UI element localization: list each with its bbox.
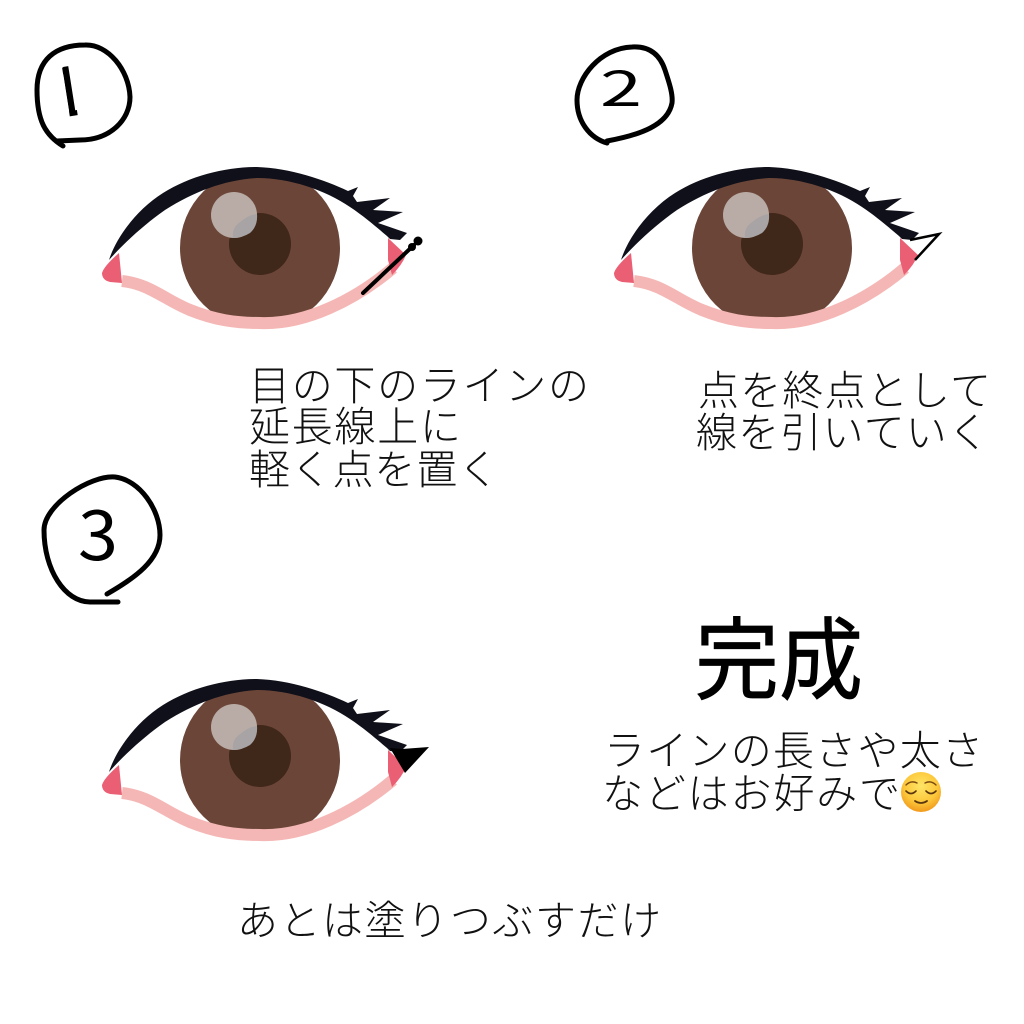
pupil <box>229 725 291 787</box>
step 3 caption: あとは塗りつぶすだけ <box>237 898 661 944</box>
outer corner <box>388 238 406 275</box>
iris <box>180 178 340 318</box>
lower lid line <box>122 780 393 835</box>
inner corner <box>614 253 634 283</box>
lower lid line <box>122 268 393 323</box>
finished note: ラインの長さや太さ <box>604 728 983 774</box>
iris <box>180 690 340 830</box>
step 1 eye with dot and guide line <box>102 167 422 328</box>
step 1 number badge: 1 <box>41 35 93 139</box>
highlight <box>723 192 769 238</box>
upper lid and lashes <box>109 167 407 260</box>
step 2 caption <box>696 368 991 456</box>
step 3 number badge: 3 <box>78 481 118 580</box>
inner corner <box>102 765 122 795</box>
upper lid and lashes <box>109 679 407 772</box>
step 1 caption: 延長線上に <box>249 404 461 450</box>
outer corner <box>900 238 918 275</box>
finished note: などはお好みで <box>602 771 900 817</box>
step 3 eye with filled wing <box>102 679 429 840</box>
step 1 caption: 目の下のラインの <box>249 363 589 409</box>
step 2 eye with outlined wing <box>614 167 939 328</box>
upper lid and lashes <box>621 167 919 260</box>
outer corner <box>388 750 406 787</box>
iris <box>692 178 852 318</box>
pupil <box>229 213 291 275</box>
step 1 number badge <box>37 35 130 146</box>
highlight <box>211 704 257 750</box>
step 1 caption: 軽く点を置く <box>249 447 499 493</box>
wing outline <box>910 234 939 260</box>
pupil <box>741 213 803 275</box>
finished note <box>602 728 983 817</box>
guide line and dot <box>363 236 422 293</box>
inner corner <box>102 253 122 283</box>
filled wing <box>390 747 429 773</box>
highlight <box>211 192 257 238</box>
heading: finished: 完成 <box>695 612 863 712</box>
step 1 caption <box>249 363 589 493</box>
step 3 number badge <box>44 477 160 602</box>
step 2 number badge <box>577 47 672 143</box>
step 2 caption: 線を引いていく <box>696 410 989 456</box>
step 2 number badge: 2 <box>600 50 642 120</box>
icon: relieved face emoji <box>901 772 941 812</box>
lower lid line <box>634 268 905 323</box>
step 2 caption: 点を終点として <box>698 368 991 414</box>
